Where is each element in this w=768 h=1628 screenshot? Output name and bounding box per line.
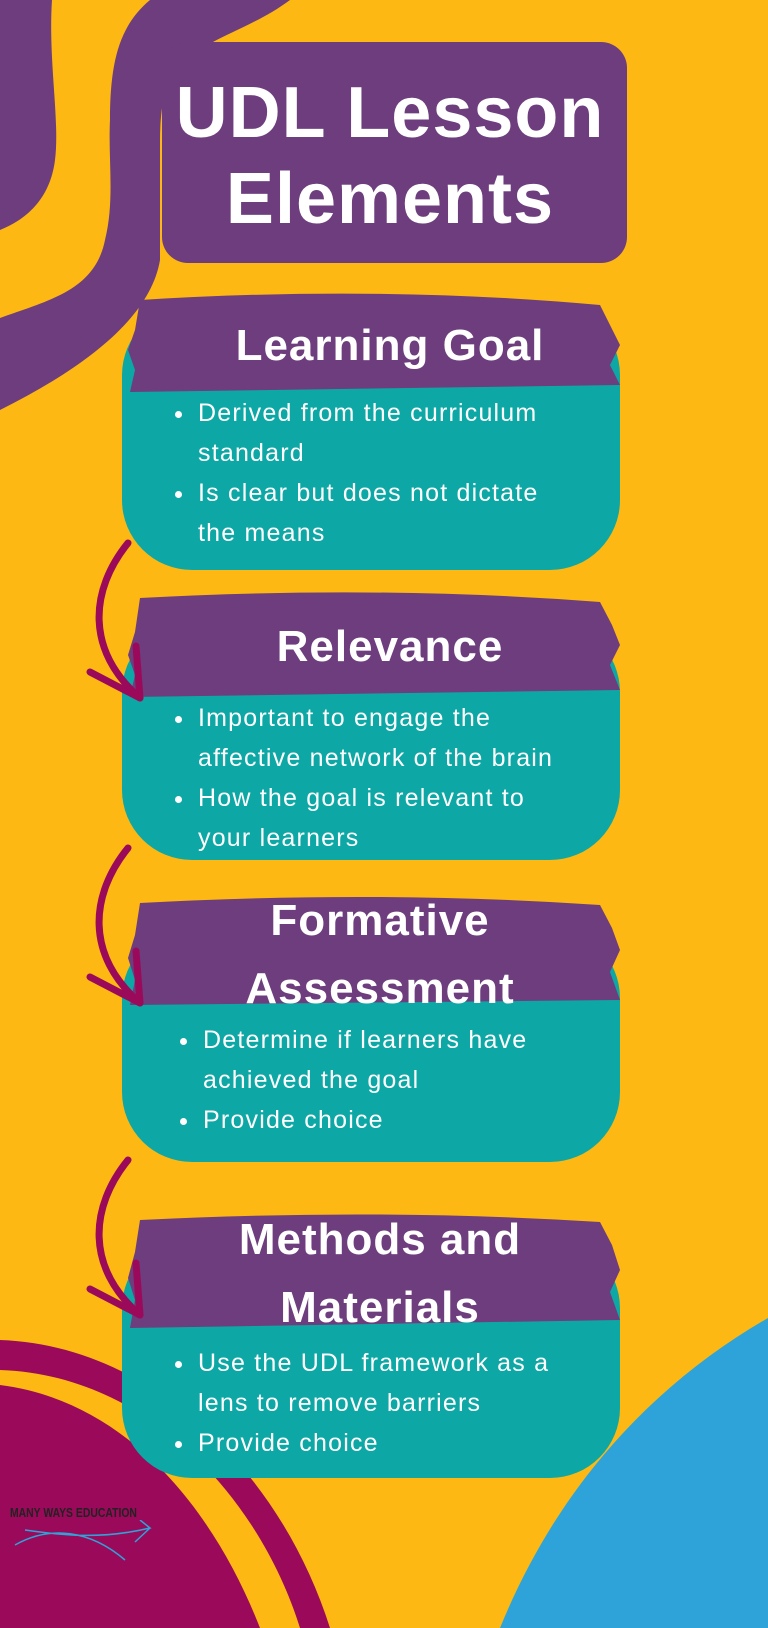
title: Elements <box>226 159 554 239</box>
bullets: Learning Goal: Derived from the curriculum <box>198 399 537 427</box>
bullets: Methods and Materials: Use the UDL framework as a <box>198 1349 549 1377</box>
bullets: Relevance: How the goal is relevant to <box>198 784 525 812</box>
logo <box>10 1505 152 1560</box>
bullets: Relevance <box>175 704 553 852</box>
heading: Formative Assessment: Formative <box>270 896 490 945</box>
arrow 2 <box>90 848 140 1003</box>
title box <box>162 42 627 263</box>
panel 4 shape <box>122 1214 620 1478</box>
bullets: Relevance: your learners <box>198 824 360 852</box>
title: UDL Lesson <box>176 73 604 153</box>
bullets: Learning Goal: the means <box>198 519 326 547</box>
panel 1 shape <box>122 294 620 570</box>
panel 3 shape <box>122 897 620 1162</box>
bullets: Relevance: affective network of the brain <box>198 744 553 772</box>
logo: MANY WAYS EDUCATION <box>10 1505 137 1520</box>
bullets: Methods and Materials <box>175 1349 549 1457</box>
bullets: Relevance: Important to engage the <box>198 704 491 732</box>
bullets: Learning Goal: Is clear but does not dictate <box>198 479 539 507</box>
bullets: Formative Assessment: Provide choice <box>203 1106 384 1134</box>
bullets: Methods and Materials: Provide choice <box>198 1429 379 1457</box>
heading: Learning Goal: Learning Goal <box>236 321 544 370</box>
title <box>176 73 604 239</box>
bullets: Learning Goal <box>175 399 539 547</box>
heading: Formative Assessment <box>245 896 515 1013</box>
arrow 3 <box>90 1160 140 1315</box>
heading: Methods and Materials <box>239 1215 521 1332</box>
bullets: Methods and Materials: lens to remove barriers <box>198 1389 481 1417</box>
heading: Formative Assessment: Assessment <box>245 964 515 1013</box>
bullets: Formative Assessment: achieved the goal <box>203 1066 419 1094</box>
bullets: Formative Assessment: Determine if learners have <box>203 1026 527 1054</box>
heading: Relevance: Relevance <box>277 622 503 671</box>
arrow 1 <box>90 543 140 698</box>
heading: Methods and Materials: Methods and <box>239 1215 521 1264</box>
bullets: Learning Goal: standard <box>198 439 305 467</box>
bullets: Formative Assessment <box>180 1026 527 1134</box>
heading: Methods and Materials: Materials <box>280 1283 480 1332</box>
panel 2 shape <box>122 592 620 860</box>
